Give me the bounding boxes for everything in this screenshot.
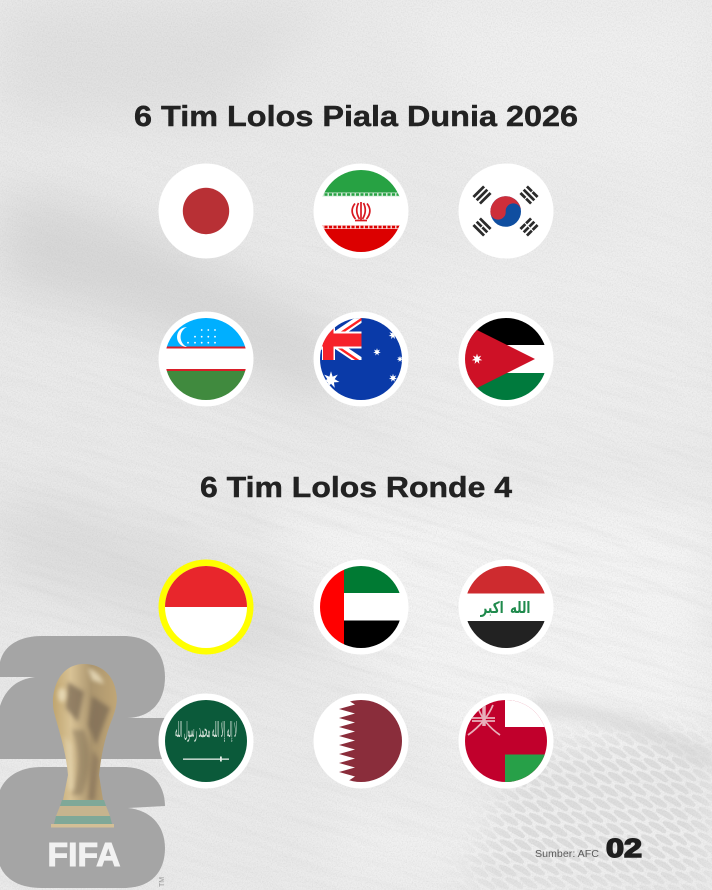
flag: Iran: [314, 164, 408, 258]
heading: qualified for round 4: 6 Tim Lolos Ronde 4: [200, 472, 512, 504]
flag: Saudi Arabia: [158, 694, 254, 788]
flag: Australia: [314, 312, 408, 406]
flag: Indonesia: [158, 560, 254, 654]
flag: Qatar: [314, 694, 408, 788]
title: qualified for World Cup: 6 Tim Lolos Piala Dunia 2026: [134, 101, 578, 133]
flag: Uzbekistan: [158, 312, 254, 406]
flag: South Korea: [458, 164, 554, 258]
flag: United Arab Emirates: [314, 560, 408, 654]
flag: Jordan: [458, 312, 554, 406]
source note: Sumber: AFC: [535, 848, 599, 860]
page number: 02: [606, 833, 642, 863]
logo numeral 6: [0, 767, 165, 888]
trademark: TM: [159, 877, 166, 887]
logo numeral 2: [0, 636, 165, 759]
flag: Oman: [458, 694, 555, 788]
FIFA 26 logo with trophy: [0, 636, 166, 888]
flag: Iraq: الله اكبر: [480, 598, 530, 617]
flag: Japan: [158, 164, 254, 258]
trophy: [51, 664, 117, 828]
flag: Iraq: [458, 560, 554, 654]
FIFA wordmark: FIFA: [48, 836, 120, 873]
text: لا إله إلا الله محمد رسول الله: [175, 718, 237, 743]
